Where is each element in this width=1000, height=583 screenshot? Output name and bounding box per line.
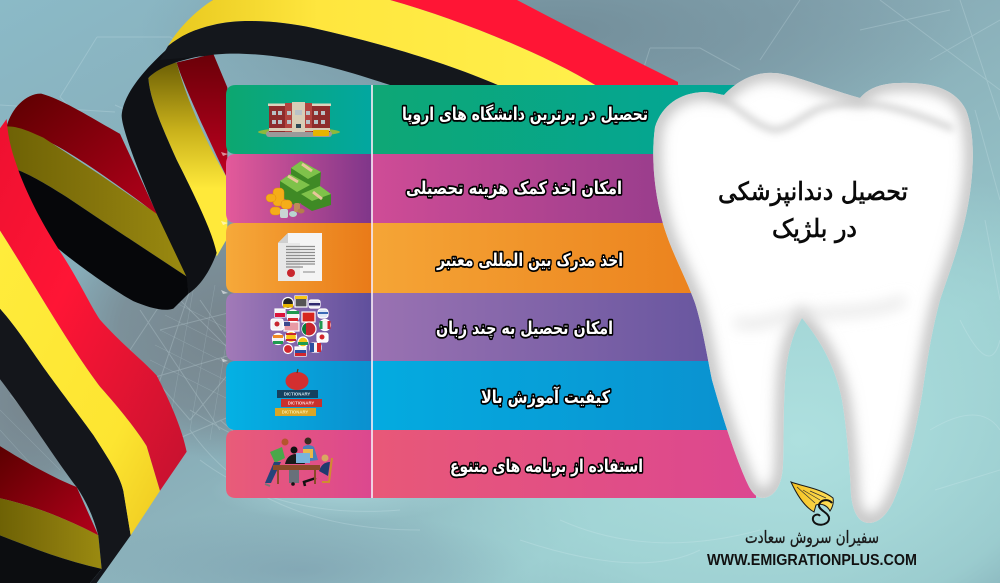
column divider xyxy=(371,85,373,498)
text: row 4: امکان تحصیل به چند زبان xyxy=(436,319,613,339)
row 5: high quality education xyxy=(226,361,772,430)
icon: money and coins xyxy=(266,161,331,218)
text: row 3: اخذ مدرک بین المللی معتبر xyxy=(436,251,623,271)
ribbon: inner back panels xyxy=(0,22,240,583)
row 6: diverse programs xyxy=(226,430,756,498)
tooth illustration xyxy=(653,73,973,523)
icon: winged swan emblem xyxy=(791,482,833,525)
text: row 2: امکان اخذ کمک هزینه تحصیلی xyxy=(406,179,622,199)
icon: certificate document xyxy=(278,233,322,281)
panel: benefits list xyxy=(226,85,772,498)
text: company name: سفیران سروش سعادت xyxy=(745,528,879,548)
text: row 6: استفاده از برنامه های متنوع xyxy=(450,457,643,477)
logo xyxy=(707,482,917,569)
title: در بلژیک xyxy=(772,214,857,243)
text: website: WWW.EMIGRATIONPLUS.COM xyxy=(707,552,917,569)
text: row 5: کیفیت آموزش بالا xyxy=(481,385,611,408)
icon: university building xyxy=(258,102,340,137)
row 1: top universities xyxy=(226,85,772,154)
ribbon: Belgian flag xyxy=(0,0,678,583)
ribbon: white edge highlights xyxy=(221,152,228,362)
title xyxy=(718,177,908,243)
icon: apple on dictionaries xyxy=(275,369,322,416)
icon: apple on dictionaries: DICTIONARY xyxy=(284,392,310,396)
icon: flag speech bubbles xyxy=(271,296,330,356)
text: row 1: تحصیل در برترین دانشگاه های اروپا xyxy=(402,104,648,125)
icon: people studying around table xyxy=(265,438,332,486)
ribbon: top band xyxy=(160,0,678,86)
icon: apple on dictionaries: DICTIONARY xyxy=(288,400,314,406)
title: تحصیل دندانپزشکی xyxy=(718,177,908,206)
row 4: multi-language study xyxy=(226,293,772,361)
row 2: tuition aid xyxy=(226,154,772,223)
ribbon: front band xyxy=(0,119,187,583)
row 3: international degree xyxy=(226,223,772,293)
icon: apple on dictionaries: DICTIONARY xyxy=(282,410,308,414)
